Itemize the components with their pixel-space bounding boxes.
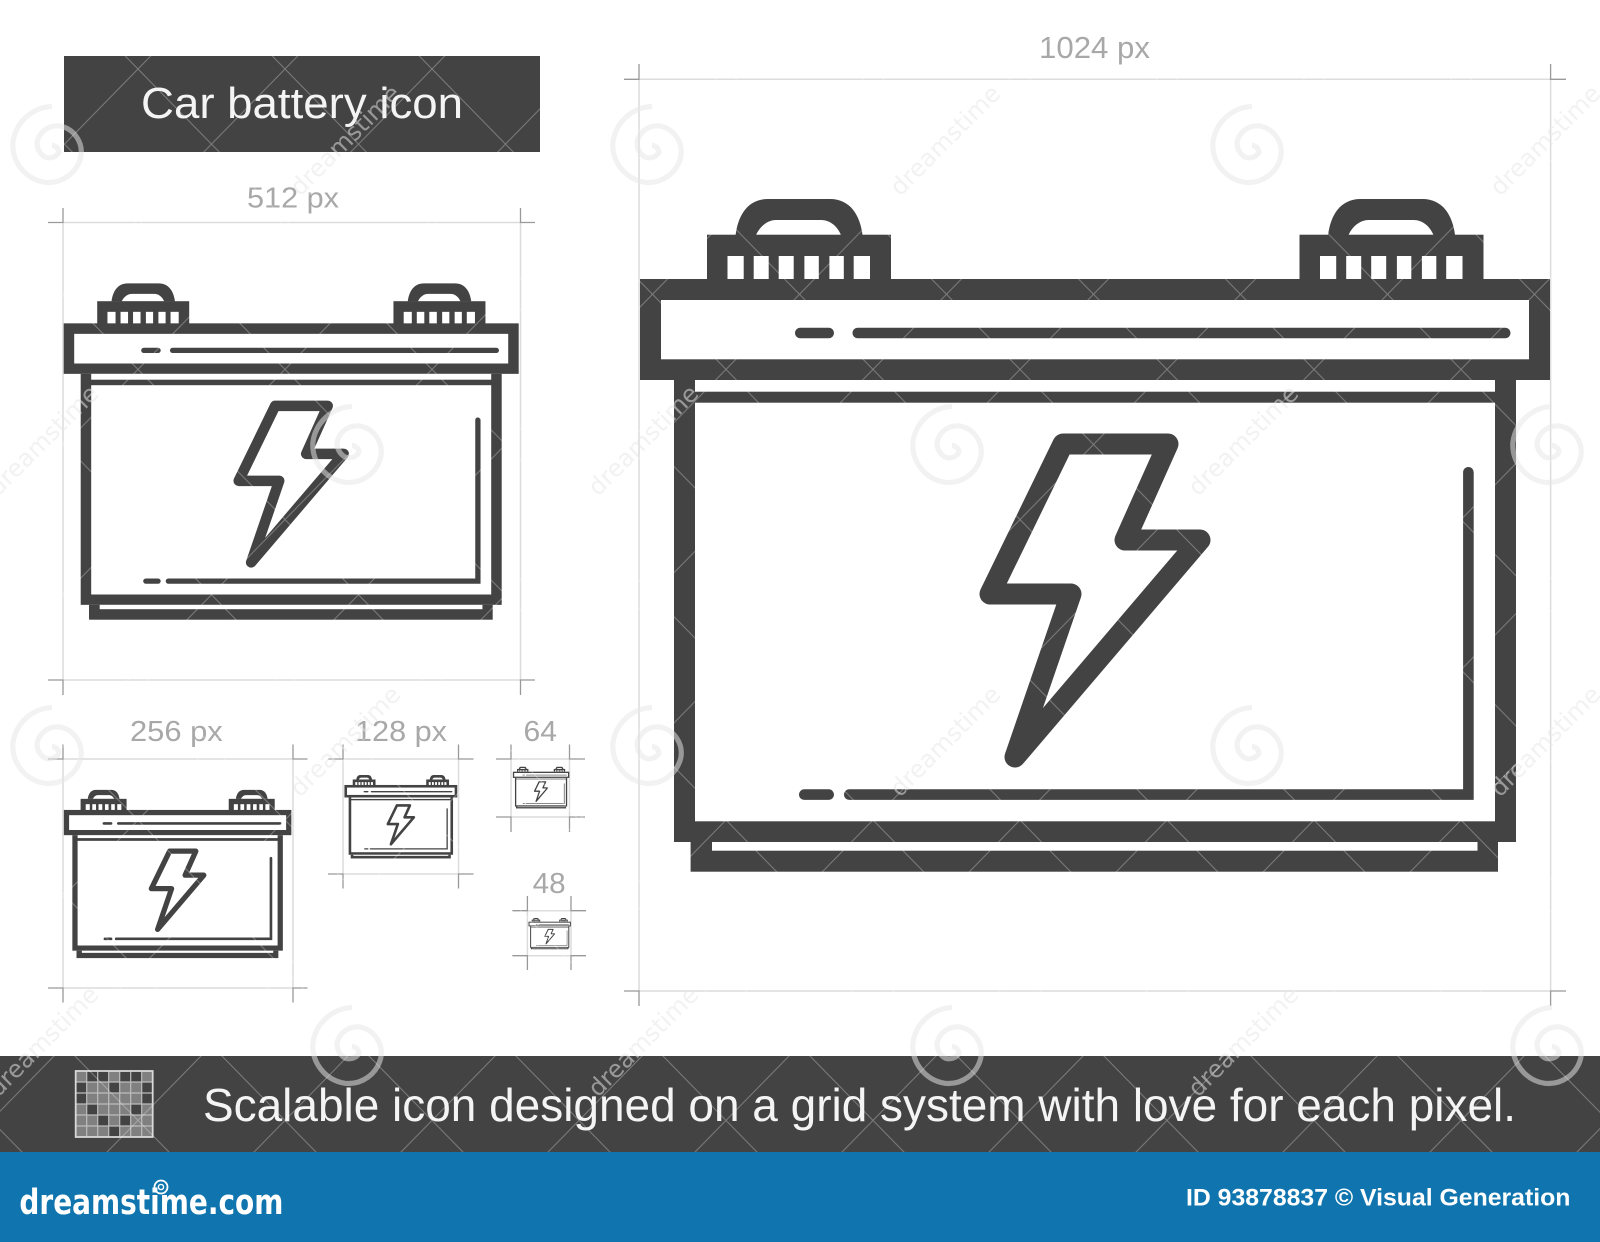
watermark overlay: dreamstime bbox=[284, 680, 406, 802]
watermark overlay: dreamstime bbox=[1182, 379, 1304, 501]
watermark overlay: dreamstime bbox=[1182, 980, 1304, 1102]
logo: dreamstime.com: dreamstime.com bbox=[19, 1183, 283, 1223]
icon: car battery 512 px bbox=[64, 283, 519, 620]
icon: pixel grid bbox=[76, 1071, 153, 1137]
guides: 1024 grid bbox=[624, 64, 1566, 1006]
image id and credit: ID 93878837 © Visual Generation bbox=[1186, 1185, 1570, 1212]
grid system band: Scalable icon designed on a grid system with love for each pixel. bbox=[203, 1079, 1516, 1131]
icon: car battery 1024 px bbox=[640, 199, 1550, 872]
footer bar bbox=[0, 1152, 1600, 1242]
title banner bbox=[64, 56, 540, 152]
watermark overlay: dreamstime bbox=[884, 680, 1006, 802]
watermark overlay: dreamstime bbox=[582, 980, 704, 1102]
size label: 64: 64 bbox=[524, 716, 557, 748]
watermark overlay: dreamstime bbox=[284, 79, 406, 201]
guides: 64 grid bbox=[496, 744, 585, 832]
size label: 128 px: 128 px bbox=[355, 716, 448, 748]
guides: 128 grid bbox=[328, 744, 474, 888]
guides: 48 grid bbox=[512, 896, 586, 970]
guides: 256 grid bbox=[48, 744, 308, 1002]
size label: 256 px: 256 px bbox=[130, 716, 223, 748]
size label: 48: 48 bbox=[533, 868, 566, 900]
watermark overlay: dreamstime bbox=[884, 79, 1006, 201]
icon: car battery 256 px bbox=[64, 790, 291, 958]
watermark overlay: dreamstime bbox=[582, 379, 704, 501]
icon: car battery 64 px bbox=[513, 767, 569, 808]
title banner: Car battery icon bbox=[141, 79, 463, 128]
grid system band bbox=[0, 1056, 1600, 1152]
icon: car battery 48 px bbox=[529, 918, 571, 949]
icon: car battery 128 px bbox=[344, 775, 457, 858]
size label: 512 px: 512 px bbox=[247, 182, 340, 214]
guides: 512 grid bbox=[48, 208, 535, 695]
size label: 1024 px: 1024 px bbox=[1039, 30, 1150, 65]
